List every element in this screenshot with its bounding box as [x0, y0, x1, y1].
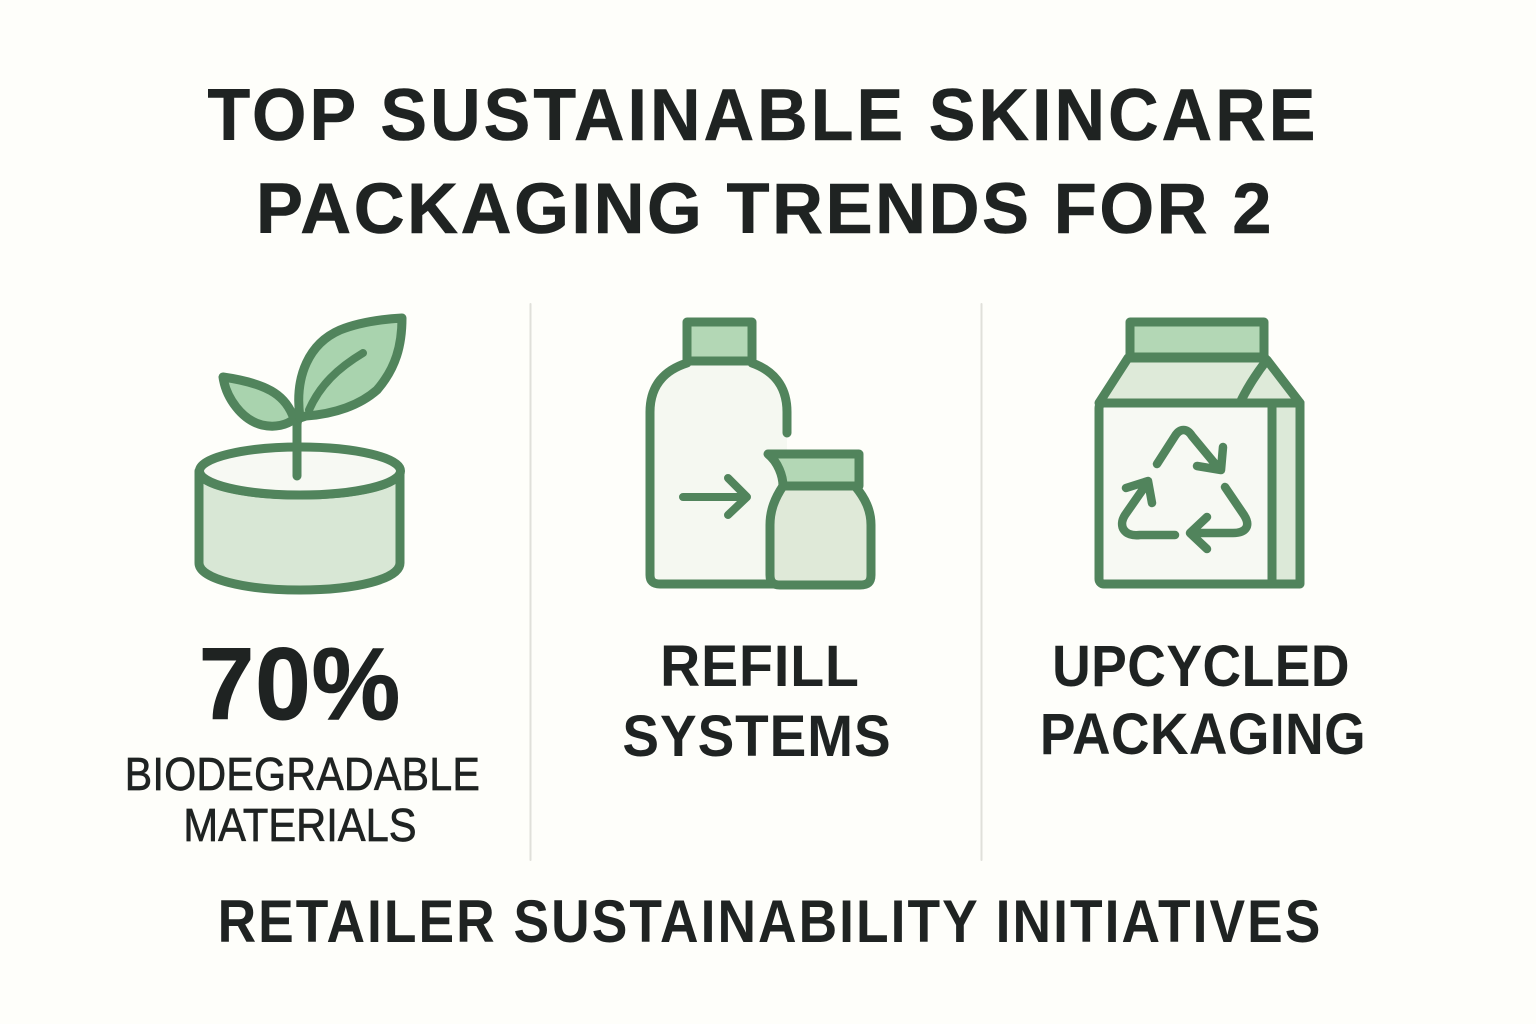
label: refill systems: REFILL	[660, 634, 860, 699]
stat: 70%: 70%	[199, 627, 401, 741]
icon: refill bottles	[650, 322, 871, 585]
label: upcycled packaging	[1040, 634, 1366, 767]
icon: plant in jar	[199, 318, 402, 590]
label: upcycled packaging: UPCYCLED	[1052, 634, 1350, 699]
label: biodegradable materials: MATERIALS	[183, 799, 417, 851]
label: biodegradable materials	[125, 748, 480, 851]
label: biodegradable materials: BIODEGRADABLE	[125, 748, 480, 800]
divider right	[980, 304, 982, 860]
icon: upcycled carton	[1099, 322, 1300, 584]
label: refill systems: SYSTEMS	[622, 704, 892, 769]
label: upcycled packaging: PACKAGING	[1040, 702, 1366, 767]
title: TOP SUSTAINABLE SKINCARE	[207, 75, 1319, 156]
title	[207, 75, 1319, 249]
label: refill systems	[622, 634, 892, 769]
divider left	[530, 304, 532, 860]
title: PACKAGING TRENDS FOR 2	[256, 170, 1274, 249]
footer heading: RETAILER SUSTAINABILITY INITIATIVES	[218, 888, 1322, 955]
